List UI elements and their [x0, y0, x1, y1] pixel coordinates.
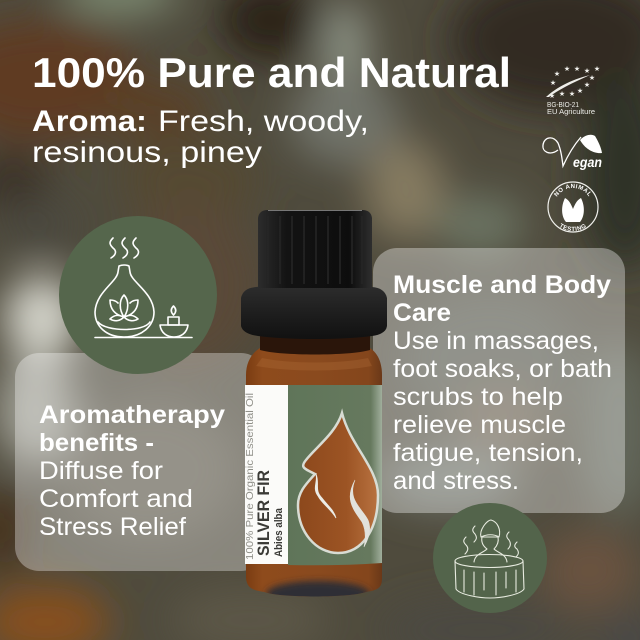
- text: muscle care description: [393, 327, 612, 495]
- icon: no animal testing: NO ANIMAL: [554, 184, 591, 197]
- heading: aromatherapy benefits: benefits -: [39, 429, 154, 457]
- heading: muscle and body care: Muscle and Body: [393, 271, 611, 299]
- text: aromatherapy description: Comfort and: [39, 485, 193, 513]
- black cap: [258, 210, 372, 288]
- heading: muscle and body care: Care: [393, 299, 451, 327]
- dark neck: [260, 335, 370, 354]
- product bottle: Abies alba: [273, 507, 285, 557]
- label: [245, 385, 289, 564]
- icon: diffuser in green circle: [59, 216, 217, 374]
- icon: EU organic leaf: [546, 65, 600, 116]
- text: muscle care description: fatigue, tension,: [393, 439, 583, 467]
- subtitle: aroma: Fresh, woody,: [158, 105, 369, 138]
- dropper collar: [241, 284, 387, 339]
- icon: EU organic leaf: ★: [584, 67, 590, 75]
- heading: aromatherapy benefits: Aromatherapy: [39, 401, 225, 429]
- icon: vegan: egan: [573, 154, 602, 170]
- label text: 100% Pure Organic Essential Oil: [245, 393, 256, 560]
- heading: aromatherapy benefits: [39, 401, 225, 457]
- icon: EU organic leaf: ★: [589, 74, 595, 82]
- product bottle: SILVER FIR: [255, 470, 273, 556]
- icon: EU organic leaf: ★: [559, 90, 565, 98]
- icon: EU organic leaf: ★: [574, 65, 580, 73]
- subtitle: aroma: [32, 105, 369, 169]
- glass highlight: [256, 358, 372, 370]
- icon: bath tub in green circle: [433, 503, 547, 613]
- icon: EU organic leaf: ★: [564, 65, 570, 73]
- icon: EU organic leaf: ★: [549, 92, 555, 100]
- subtitle: aroma: Aroma:: [32, 105, 147, 138]
- icon: EU organic leaf: EU Agriculture: [547, 109, 595, 116]
- heading: muscle and body care: [393, 271, 611, 327]
- icon: no animal testing: TESTING: [560, 223, 586, 231]
- text: muscle care description: Use in massages,: [393, 327, 599, 355]
- subtitle: aroma: resinous, piney: [32, 136, 262, 169]
- icon: EU organic leaf: ★: [594, 65, 600, 73]
- panel: aromatherapy benefits: [15, 353, 265, 571]
- icon: EU organic leaf: ★: [569, 90, 575, 98]
- product bottle: [241, 210, 387, 607]
- text: muscle care description: scrubs to help: [393, 383, 563, 411]
- text: muscle care description: relieve muscle: [393, 411, 566, 439]
- icon: EU organic leaf: ★: [584, 81, 590, 89]
- icon: vegan: [543, 135, 602, 170]
- drop emblem: [298, 413, 378, 553]
- icon: no animal testing: [547, 181, 599, 233]
- icon: EU organic leaf: ★: [550, 79, 556, 87]
- text: muscle care description: and stress.: [393, 467, 519, 495]
- dark bottle base: [262, 576, 373, 596]
- text: aromatherapy description: [39, 457, 193, 541]
- icon: EU organic leaf: ★: [577, 87, 583, 95]
- text: aromatherapy description: Diffuse for: [39, 457, 163, 485]
- icon: EU organic leaf: BG-BIO-21: [547, 102, 579, 109]
- title: 100% Pure and Natural: [32, 49, 511, 96]
- glass body: [246, 346, 382, 596]
- panel: muscle and body care: [373, 248, 625, 513]
- icon: EU organic leaf: ★: [554, 70, 560, 78]
- text: muscle care description: foot soaks, or bath: [393, 355, 612, 383]
- text: aromatherapy description: Stress Relief: [39, 513, 186, 541]
